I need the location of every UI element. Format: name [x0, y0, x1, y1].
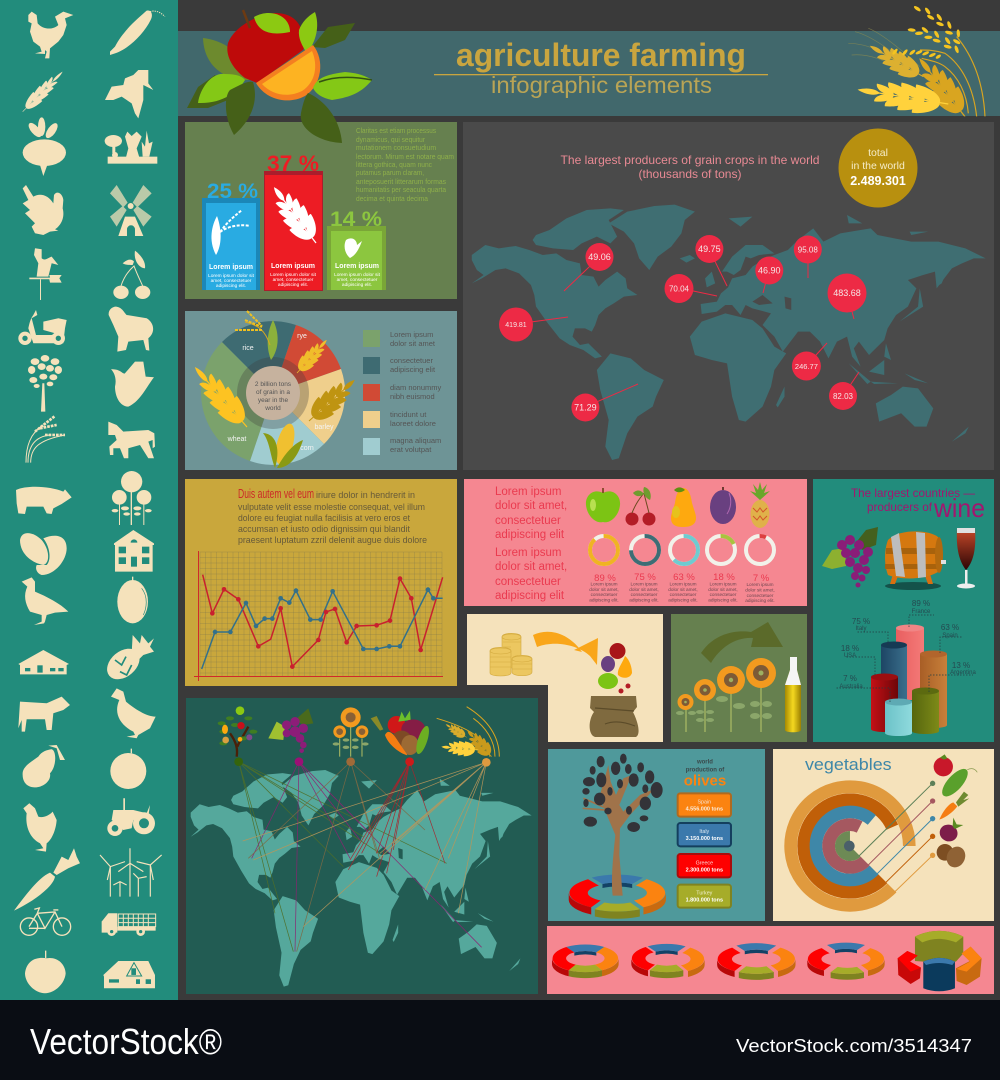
icon: cucumber	[110, 10, 165, 55]
bar: 37 percent	[263, 151, 327, 291]
text block: claritas: mutationem consuetudium	[356, 143, 436, 152]
legend: Turkey	[678, 885, 731, 908]
icon: wine glass	[957, 528, 975, 588]
bar: 14 percent: Lorem ipsum	[335, 263, 379, 270]
text block: ring labels: Lorem ipsum	[630, 582, 658, 586]
chart: producer markers: 82.03	[833, 392, 854, 401]
chart: ring 1	[552, 944, 619, 978]
bar: 25 percent: Lorem ipsum	[209, 264, 253, 271]
panel: vegetables	[773, 749, 994, 921]
chart: progress rings	[590, 536, 774, 564]
panel: percentage bars	[185, 122, 457, 299]
text block: claritas: dynamicus, qui sequitur	[356, 135, 425, 144]
icon: green apple	[586, 488, 620, 522]
icon: tomato	[934, 754, 953, 776]
text block: ring labels: 75 %	[634, 572, 656, 583]
icon: turkey	[23, 185, 63, 235]
text block: lorem ipsum: dolor sit amet,	[495, 500, 567, 512]
chart: donut	[201, 321, 345, 465]
chart labels: 75 %	[852, 617, 870, 626]
chart: exploded blocks	[898, 931, 982, 991]
chart labels: Argentina	[950, 670, 977, 676]
icon: sack	[590, 696, 639, 737]
icon: falling fruit	[598, 643, 632, 694]
text block: duis autem: dolore eu feugiat nulla facilisis at vero eros et	[238, 512, 410, 523]
icon: barn	[18, 650, 69, 674]
icon: corn cob	[263, 422, 303, 468]
chart legend: Lorem ipsum	[390, 330, 433, 339]
text block: duis autem: iriure dolor in hendrerit in	[316, 489, 415, 500]
bar: 14 percent: 14 %	[330, 208, 382, 231]
icon: carrot	[939, 792, 969, 820]
icon: carrot	[14, 848, 80, 911]
text block: ring labels: consectetuer	[631, 592, 658, 597]
chart: leader lines	[859, 781, 935, 892]
text block: lorem ipsum: adipiscing elit	[495, 590, 565, 602]
icon: hen	[23, 803, 57, 852]
icon: olive tree	[582, 754, 663, 896]
bar: 25 percent	[202, 180, 260, 290]
chart labels	[835, 599, 977, 702]
text block: claritas: anteposuerit litterarum formas	[356, 177, 446, 186]
chart: donut: of grain in a	[256, 389, 290, 396]
footer url: VectorStock.com/3514347	[736, 1035, 972, 1056]
bar: 37 percent: 37 %	[267, 151, 319, 176]
heading: world production of olives	[684, 759, 726, 790]
chart labels: USA	[844, 653, 856, 659]
chart: producer markers: 49.75	[698, 244, 721, 254]
icon: scooter	[18, 310, 67, 345]
panel: 3D ring variants	[547, 926, 994, 994]
panel: grain producers map	[463, 122, 994, 470]
icon: corn	[111, 362, 154, 407]
icon: horse	[108, 422, 155, 458]
chart: donut: wheat	[227, 436, 246, 443]
icon: cow	[18, 697, 70, 732]
text block: claritas: Claritas est etiam processus	[356, 126, 436, 135]
heading: wine: The largest countries —	[851, 486, 975, 500]
chart labels: Spain	[942, 633, 958, 639]
title: agriculture farming	[456, 37, 746, 73]
icon: fruit and leaves	[187, 10, 372, 143]
chart: donut: corn	[300, 445, 314, 452]
icon: wind turbines	[100, 848, 162, 897]
icon: pineapple	[750, 482, 770, 528]
text block: lorem ipsum: consectetuer	[495, 515, 561, 527]
chart: producer markers: 483.68	[833, 288, 861, 298]
chart: donut: year in the	[258, 397, 289, 404]
heading: grain producers	[560, 153, 820, 181]
text block: lorem ipsum	[495, 486, 567, 602]
icon: header wheat	[848, 5, 985, 125]
bar: 37 percent: adipiscing elit.	[278, 282, 308, 288]
icon: rooster	[28, 12, 73, 58]
icon: duck	[22, 577, 68, 625]
text block: ring labels: 18 %	[713, 572, 735, 583]
icon: sunflowers	[333, 707, 369, 757]
heading: wine	[851, 486, 985, 523]
icon: cherries	[113, 251, 150, 299]
text block: ring labels: Lorem ipsum	[709, 582, 737, 586]
chart labels: 7 %	[843, 674, 857, 683]
icon: cherries	[626, 487, 656, 526]
icon: turnip	[23, 117, 66, 176]
text block: ring labels: adipiscing elit.	[629, 598, 659, 602]
bar: 14 percent: Lorem ipsum dolor sit	[334, 272, 381, 278]
icon: barley ear	[301, 371, 362, 430]
text block: ring labels: 63 %	[673, 572, 695, 583]
text block: ring labels: consectetuer	[591, 592, 618, 597]
icon: apple	[25, 951, 66, 993]
chart: producer markers: 71.29	[574, 402, 597, 412]
callout: world total: in the world	[851, 160, 905, 172]
legend: Greece: Greece	[696, 860, 713, 866]
icon: grapes	[822, 527, 878, 588]
icon: house	[114, 530, 154, 572]
text block: claritas	[356, 126, 454, 203]
icon: weather vane	[29, 248, 62, 300]
map: world	[472, 205, 986, 460]
icon: rye ear	[291, 335, 332, 378]
chart legend: diam nonummy	[390, 383, 442, 392]
text block: ring labels: dolor sit amet,	[668, 587, 698, 592]
heading: wine: producers of	[867, 500, 933, 514]
panel: header band	[178, 5, 1000, 125]
chart: 3D cylinders	[871, 624, 947, 736]
chart labels: Italy	[855, 626, 867, 632]
heading: grain producers: The largest producers of grain crops in the world	[560, 153, 820, 167]
panel: grain donut chart	[185, 311, 457, 470]
icon: oil bottle	[785, 657, 801, 732]
text block: ring labels: adipiscing elit.	[745, 598, 775, 603]
bar: 14 percent: adipiscing elit.	[342, 282, 372, 288]
icon: pear	[23, 745, 65, 787]
text block: ring labels: 89 %	[594, 573, 616, 584]
chart: producer markers	[499, 235, 866, 422]
chart: connection lines	[239, 762, 486, 952]
heading: world production of olives: world	[696, 759, 713, 765]
text block: ring labels: consectetuer	[747, 593, 774, 598]
chart: ring 4	[807, 943, 885, 980]
bar: 37 percent: Lorem ipsum dolor sit	[270, 272, 317, 278]
icon: wheat ear	[18, 67, 67, 116]
chart legend: laoreet dolore	[390, 419, 436, 428]
heading: vegetables: vegetables	[805, 756, 892, 774]
map: world	[191, 770, 532, 987]
footer	[0, 1000, 1000, 1080]
text block: lorem ipsum: dolor sit amet,	[495, 561, 567, 573]
icon: beans	[20, 533, 67, 575]
icon: sunflowers	[112, 471, 152, 525]
chart: producer markers: 419.81	[505, 322, 527, 329]
chart legend	[363, 330, 442, 455]
text block: ring labels: adipiscing elit.	[589, 598, 619, 602]
bar: 25 percent: Lorem ipsum dolor sit	[208, 273, 255, 279]
icon: vegetable plot	[105, 131, 157, 164]
chart: producer markers: 46.90	[758, 266, 781, 276]
icon: grain stalks	[26, 416, 65, 463]
legend: Spain: Spain	[697, 800, 711, 806]
icon: coin stacks	[490, 633, 532, 676]
heading: wine: wine	[933, 493, 985, 523]
chart: donut: barley	[314, 424, 334, 431]
chart labels: 89 %	[912, 599, 930, 608]
chart: producer markers: 246.77	[795, 362, 818, 371]
icon: pineapple	[101, 635, 154, 685]
text block: claritas: lectorum. Mirum est notare quam	[356, 152, 454, 161]
heading: world production of olives: production of	[686, 768, 724, 774]
heading: world production of olives: olives	[684, 773, 726, 790]
chart: donut: rye	[297, 333, 307, 340]
chart: line graph	[194, 551, 443, 681]
panel: fruit percentages	[464, 479, 807, 606]
text block: ring labels: 7 %	[753, 573, 770, 584]
chart: ring 2	[631, 944, 705, 978]
callout: world total: total	[868, 147, 888, 159]
legend: Greece	[678, 854, 731, 877]
icon: fruit tree	[218, 706, 257, 757]
footer logo: VectorStock®	[30, 1021, 222, 1062]
chart legend: consectetuer	[390, 356, 433, 365]
legend: Spain: 4.556.000 tons	[686, 807, 723, 813]
icon: plum	[117, 577, 148, 623]
icon: barrel	[885, 531, 946, 590]
legend: Italy: 3.150.000 tons	[686, 836, 723, 842]
text block: ring labels	[589, 572, 775, 603]
bar: 37 percent: Lorem ipsum	[271, 263, 315, 270]
icon: plum	[710, 487, 736, 524]
text block: lorem ipsum: Lorem ipsum	[495, 486, 561, 498]
text block: ring labels: Lorem ipsum	[746, 582, 774, 587]
icon: truck	[102, 913, 156, 936]
chart: producer markers: 95.08	[798, 246, 818, 254]
text block: ring labels: adipiscing elit.	[708, 598, 738, 602]
icon: wheat bundle	[437, 707, 499, 762]
bar: 14 percent	[327, 208, 386, 290]
icon: rice stalk	[235, 311, 278, 360]
icon: tree	[28, 355, 62, 412]
legend: Turkey: 1.800.000 tons	[686, 898, 723, 904]
text block: ring labels: consectetuer	[710, 592, 737, 597]
chart legend: dolor sit amet	[390, 339, 436, 348]
bar: 25 percent: adipiscing elit.	[216, 283, 246, 289]
text block: ring labels: Lorem ipsum	[590, 582, 618, 586]
text block: ring labels: adipiscing elit.	[668, 598, 698, 602]
chart: radial bars	[791, 787, 909, 905]
icon: sunflowers	[676, 658, 776, 732]
arrow: olive	[701, 622, 783, 663]
bar: 25 percent: amet, consectetuer	[211, 278, 252, 284]
bar: 14 percent: amet, consectetuer	[337, 277, 378, 283]
legend: Italy: Italy	[699, 829, 710, 835]
text block: claritas: putamus parum claram,	[356, 168, 424, 177]
chart labels: 63 %	[941, 623, 959, 632]
text block: claritas: decima et quinta decima	[356, 194, 429, 203]
text block: duis autem	[238, 487, 427, 545]
chart: donut: 2 billion tons	[255, 381, 292, 388]
text block: duis autem: Duis autem vel eum	[238, 487, 314, 501]
chart legend: magna aliquam	[390, 436, 441, 445]
text block: ring labels: consectetuer	[670, 592, 697, 597]
chart: producer markers: 49.06	[588, 252, 611, 262]
bar: 25 percent: 25 %	[207, 180, 258, 203]
icon: wheat ear	[185, 359, 257, 435]
text block: lorem ipsum: adipiscing elit	[495, 529, 565, 541]
icon: pear	[671, 487, 696, 527]
text block: claritas: littera gothica, quam nunc	[356, 160, 432, 169]
icon: beet	[937, 818, 963, 844]
chart legend: adipiscing elit	[390, 365, 436, 374]
icon: pig	[16, 487, 72, 514]
icon: bicycle	[20, 908, 71, 935]
panel: line chart	[185, 479, 457, 686]
callout: world total: 2.489.301	[850, 174, 906, 188]
text block: ring labels: Lorem ipsum	[669, 582, 697, 586]
text block: ring labels: dolor sit amet,	[708, 587, 738, 592]
chart labels: Australia	[839, 684, 863, 690]
chart: ring 3	[717, 943, 796, 980]
chart: donut: rice	[242, 345, 254, 352]
bar: 37 percent: amet, consectetuer	[273, 277, 314, 283]
icon: goose	[111, 688, 156, 738]
text block: ring labels: dolor sit amet,	[589, 587, 619, 592]
chart: 3D ring	[569, 875, 666, 919]
legend: Greece: 2.300.000 tons	[686, 867, 723, 873]
chart legend: erat volutpat	[390, 445, 432, 454]
chart: donut: world	[264, 405, 281, 412]
legend: Spain	[678, 793, 731, 817]
chart legend: nibh euismod	[390, 392, 435, 401]
heading: grain producers: (thousands of tons)	[638, 167, 742, 181]
subtitle: infographic elements	[491, 72, 712, 98]
icon: sheep	[109, 307, 153, 352]
icon: cucumber	[938, 765, 977, 800]
icon: orange	[110, 749, 146, 789]
text block: ring labels: dolor sit amet,	[745, 588, 775, 592]
text block: lorem ipsum: consectetuer	[495, 576, 561, 588]
arrow: orange	[533, 632, 598, 665]
text block: ring labels: dolor sit amet,	[629, 587, 659, 592]
icon: grape leaves	[105, 70, 153, 118]
icon: tractor	[107, 798, 155, 836]
chart labels: 18 %	[841, 644, 859, 653]
text block: duis autem: vulputate velit esse molestie consequat, vel illum	[238, 501, 425, 512]
icon: farmhouse	[103, 961, 155, 988]
icon: potatoes	[937, 844, 969, 870]
panel: icon sidebar	[0, 0, 178, 1000]
panel: olives	[548, 749, 765, 921]
icon: grapes	[268, 708, 313, 753]
legend: Italy	[678, 823, 731, 846]
chart: source nodes	[234, 757, 491, 767]
text block: claritas: humanitatis per seacula quarta	[356, 185, 447, 194]
callout: world total	[838, 128, 918, 208]
chart: producer markers: 70.04	[669, 284, 690, 294]
chart labels: France	[912, 609, 931, 615]
text block: duis autem: praesent luptatum zzril delenit augue duis dolore	[238, 534, 427, 545]
panel: food origin map	[186, 698, 538, 994]
legend: Turkey: Turkey	[696, 891, 713, 897]
chart legend: tincidunt ut	[390, 410, 427, 419]
icon: vegetables	[371, 711, 432, 755]
icon: windmill	[110, 185, 152, 236]
text block: duis autem: accumsan et iusto odio dignissim qui blandit	[238, 523, 410, 534]
panel: wine producers	[813, 479, 994, 742]
panel: sunflower oil	[671, 614, 807, 742]
text block: lorem ipsum: Lorem ipsum	[495, 547, 561, 559]
panel: coins to fruit	[467, 614, 663, 742]
chart labels: 13 %	[952, 661, 970, 670]
